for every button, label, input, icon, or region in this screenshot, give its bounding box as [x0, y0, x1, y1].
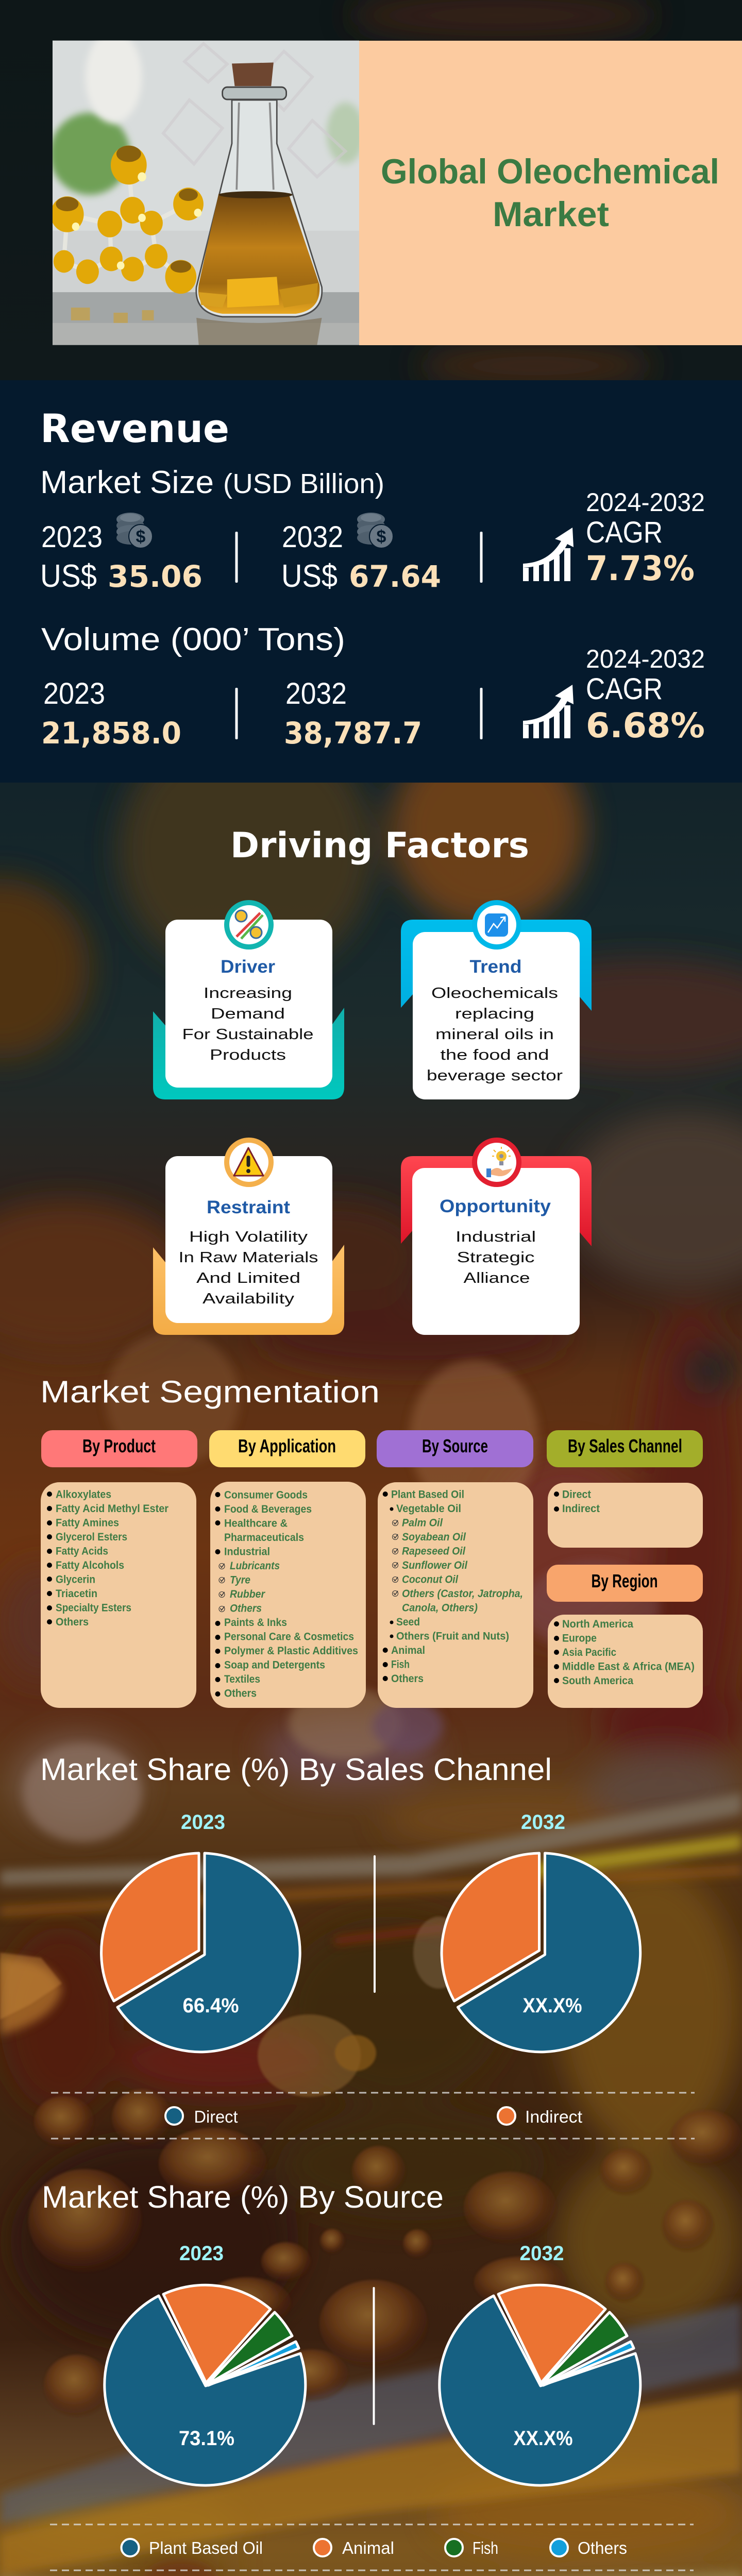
- card text: the food and: [440, 1047, 549, 1063]
- stat: market size CAGR: 2024-2032: [586, 488, 705, 517]
- stat: market size 2032: 2032: [282, 520, 343, 554]
- header: [41, 1430, 197, 1467]
- panel: by application: [209, 1430, 366, 1708]
- card text: High Volatility: [189, 1229, 308, 1245]
- card text: Availability: [203, 1291, 295, 1307]
- list: Healthcare &: [224, 1518, 288, 1529]
- stat: volume 2023: [41, 677, 181, 751]
- list: [210, 1482, 366, 1708]
- divider: [235, 532, 238, 583]
- list: Polymer & Plastic Additives: [224, 1645, 358, 1657]
- stat: volume 2032: 38,787.7: [284, 716, 422, 751]
- chart: sales channel pies: [102, 1811, 640, 2052]
- list: Rubber: [230, 1588, 266, 1600]
- list: Plant Based Oil: [391, 1489, 464, 1500]
- stat: market size CAGR: CAGR: [586, 516, 663, 549]
- stat: market size 2023: 2023: [41, 520, 103, 554]
- divider: [235, 688, 238, 739]
- heading: market share by source: Market Share (%) By Source: [42, 2180, 444, 2214]
- title: Market: [493, 195, 609, 234]
- list: Canola, Others): [402, 1602, 478, 1614]
- header: By Application: [238, 1435, 336, 1456]
- market size label: [40, 465, 384, 500]
- panel: trend card: [401, 900, 592, 1099]
- pie 2023: [105, 2242, 306, 2485]
- pie 2032: XX.X%: [513, 2427, 573, 2450]
- card text: mineral oils in: [435, 1026, 554, 1043]
- list: Pharmaceuticals: [224, 1532, 304, 1544]
- icon: bulb in hand: [472, 1138, 521, 1187]
- card text: replacing: [455, 1006, 534, 1022]
- pie 2023: 2023: [181, 1811, 225, 1834]
- list: Fatty Acids: [56, 1546, 108, 1557]
- pie 2032: 2032: [521, 1811, 565, 1834]
- card text: In Raw Materials: [178, 1249, 318, 1266]
- legend: source: Others: [578, 2538, 627, 2557]
- list: Alkoxylates: [56, 1489, 111, 1500]
- card text: beverage sector: [427, 1067, 563, 1084]
- list: Textiles: [224, 1673, 260, 1685]
- flask: [196, 62, 322, 345]
- card text: For Sustainable: [182, 1026, 313, 1043]
- list: Industrial: [224, 1546, 270, 1558]
- pie 2032: [442, 1811, 640, 2052]
- list: Europe: [562, 1632, 597, 1645]
- list: Others: [224, 1688, 257, 1699]
- stat: volume CAGR: CAGR: [586, 672, 663, 706]
- legend: source: Plant Based Oil: [149, 2538, 263, 2557]
- divider: [480, 532, 482, 583]
- stat: market size 2032: 67.64: [349, 559, 441, 594]
- list: Lubricants: [230, 1560, 280, 1572]
- list: Others (Castor, Jatropha,: [402, 1588, 523, 1600]
- market size label: (USD Billion): [223, 468, 384, 499]
- card text: [182, 985, 313, 1063]
- legend: sales channel: Direct: [194, 2107, 238, 2126]
- stat: volume CAGR: [523, 645, 705, 745]
- icon: coins: $: [136, 527, 146, 547]
- list: Glycerol Esters: [56, 1531, 127, 1543]
- heading: driving factors: Driving Factors: [230, 825, 529, 866]
- header: By Source: [422, 1435, 488, 1456]
- list: Consumer Goods: [224, 1489, 308, 1501]
- panel: driver card: [153, 900, 344, 1099]
- stat: market size 2023: 35.06: [108, 559, 203, 594]
- card text: [427, 985, 563, 1084]
- list: Fatty Alcohols: [56, 1560, 124, 1571]
- pie 2023: 66.4%: [182, 1994, 239, 2017]
- list: Vegetable Oil: [396, 1503, 461, 1515]
- card title: Trend: [470, 957, 521, 977]
- stat: volume 2032: [284, 677, 422, 751]
- list: Soyabean Oil: [402, 1531, 466, 1543]
- list: Fatty Acid Methyl Ester: [56, 1503, 168, 1515]
- card text: Oleochemicals: [431, 985, 558, 1002]
- pie 2032: XX.X%: [522, 1994, 582, 2017]
- stat: volume CAGR: 6.68%: [586, 706, 705, 745]
- card text: [456, 1229, 536, 1286]
- icon: growth chart: [523, 685, 574, 738]
- list: Specialty Esters: [56, 1602, 131, 1614]
- legend: source: Fish: [473, 2538, 498, 2557]
- list: South America: [562, 1675, 633, 1687]
- list: Animal: [391, 1645, 425, 1656]
- list: [548, 1483, 703, 1548]
- list: Rapeseed Oil: [402, 1546, 466, 1557]
- heading: market segmentation: Market Segmentation: [40, 1375, 380, 1409]
- card text: Products: [210, 1047, 286, 1063]
- pie 2023: 2023: [179, 2242, 224, 2265]
- list: Others: [56, 1616, 89, 1628]
- icon: warning triangle: [224, 1138, 274, 1187]
- panel: restraint card: [153, 1138, 344, 1335]
- volume label: Volume (000’ Tons): [41, 622, 345, 657]
- header: By Product: [82, 1435, 156, 1456]
- stat: volume 2023: 21,858.0: [41, 716, 181, 751]
- title: [381, 152, 719, 234]
- card text: And Limited: [196, 1270, 300, 1286]
- list: [548, 1615, 703, 1708]
- icon: coins: [357, 513, 393, 548]
- list: Fish: [391, 1659, 410, 1670]
- card text: Industrial: [456, 1229, 536, 1245]
- list: Asia Pacific: [562, 1647, 616, 1658]
- card text: Alliance: [464, 1270, 530, 1286]
- pie 2032: 2032: [519, 2242, 564, 2265]
- list: Triacetin: [56, 1588, 97, 1600]
- pie 2023: [102, 1811, 300, 2052]
- list: Paints & Inks: [224, 1617, 287, 1629]
- chart: source pies: [105, 2242, 640, 2485]
- icon: coins: $: [377, 527, 386, 547]
- list: Others: [391, 1673, 424, 1685]
- list: Sunflower Oil: [402, 1560, 468, 1571]
- stat: market size CAGR: 7.73%: [586, 549, 695, 588]
- card text: Strategic: [457, 1249, 535, 1266]
- header: By Sales Channel: [568, 1435, 682, 1456]
- stat: market size 2032: [281, 513, 441, 594]
- icon: driver arrows and gears: [224, 900, 274, 950]
- panel: revenue: [0, 380, 742, 783]
- header: [377, 1430, 533, 1467]
- card title: Driver: [221, 957, 275, 977]
- list: Tyre: [230, 1574, 250, 1586]
- list: Fatty Amines: [56, 1517, 119, 1529]
- header: [547, 1565, 703, 1602]
- heading: market share by sales channel: Market Share (%) By Sales Channel: [40, 1752, 552, 1787]
- list: [378, 1482, 533, 1708]
- panel: hero banner: [49, 31, 742, 349]
- card text: [178, 1229, 318, 1307]
- header: By Region: [592, 1570, 657, 1591]
- title panel: [359, 41, 742, 345]
- icon: trend chart: [472, 900, 521, 950]
- list: [41, 1482, 196, 1708]
- pie 2023: 73.1%: [179, 2427, 234, 2450]
- pie 2032: [440, 2242, 640, 2485]
- market size label: Market Size: [40, 465, 214, 500]
- panel: by source: [377, 1430, 533, 1708]
- panel: by product: [41, 1430, 197, 1708]
- stat: volume 2023: 2023: [43, 677, 105, 710]
- stat: market size 2032: US$: [281, 558, 338, 594]
- hero photo: oil flask and molecule: [49, 31, 364, 349]
- list: Middle East & Africa (MEA): [562, 1661, 695, 1672]
- list: North America: [562, 1618, 633, 1630]
- card title: Opportunity: [440, 1196, 551, 1216]
- heading: revenue: Revenue: [40, 405, 229, 451]
- list: Others: [230, 1602, 262, 1615]
- panel: by sales channel: [547, 1430, 703, 1548]
- icon: growth chart: [523, 528, 574, 581]
- header: [209, 1430, 365, 1467]
- list: Seed: [396, 1616, 420, 1628]
- stat: market size CAGR: [523, 488, 705, 588]
- list: Coconut Oil: [402, 1573, 459, 1586]
- card title: Restraint: [207, 1197, 290, 1217]
- divider: [480, 688, 482, 739]
- divider: [373, 2287, 375, 2425]
- divider: [374, 1855, 376, 1993]
- stat: volume 2032: 2032: [285, 677, 347, 710]
- legend: sales channel: Indirect: [525, 2107, 582, 2126]
- icon: coins: [116, 513, 153, 548]
- list: Personal Care & Cosmetics: [224, 1631, 354, 1642]
- card text: Demand: [211, 1006, 285, 1022]
- list: Others (Fruit and Nuts): [396, 1630, 509, 1642]
- legend: sales channel: [51, 2093, 695, 2139]
- list: Glycerin: [56, 1573, 95, 1586]
- panel: opportunity card: [401, 1138, 592, 1335]
- list: Indirect: [562, 1503, 600, 1515]
- list: Food & Beverages: [224, 1503, 312, 1515]
- list: Palm Oil: [402, 1517, 443, 1529]
- legend: source: Animal: [342, 2538, 394, 2557]
- title: Global Oleochemical: [381, 152, 719, 191]
- stat: market size 2023: US$: [40, 558, 97, 594]
- stat: market size 2023: [40, 513, 203, 594]
- header: [547, 1430, 703, 1467]
- card text: Increasing: [204, 985, 292, 1002]
- stat: volume CAGR: 2024-2032: [586, 645, 705, 673]
- list: Soap and Detergents: [224, 1659, 325, 1671]
- list: Direct: [562, 1489, 591, 1500]
- panel: by region: [547, 1565, 703, 1708]
- legend: source: [50, 2524, 694, 2570]
